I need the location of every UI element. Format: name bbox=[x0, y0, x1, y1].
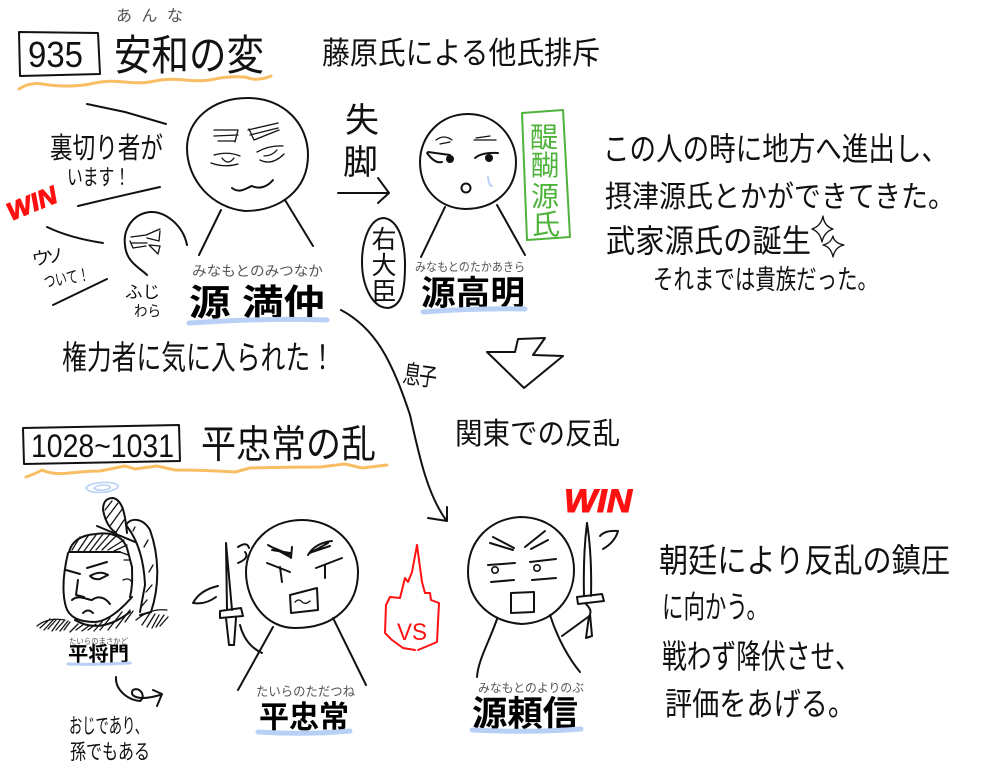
figure: Fujiwara: わら bbox=[134, 303, 161, 320]
name: Taira no Tadatsune: 平忠常 bbox=[259, 700, 349, 735]
name: Minamoto no Yorinobu bbox=[472, 681, 584, 734]
label: Daigo Genji: 醍 bbox=[530, 122, 558, 153]
name: Minamoto no Mitsunaka: 源 満仲 bbox=[189, 282, 325, 323]
title: 平忠常の乱: 平忠常の乱 bbox=[201, 424, 376, 467]
figure: Taira no Masakado portrait bbox=[37, 482, 168, 632]
label: minister of the right: 臣 bbox=[371, 278, 397, 306]
figure: Taira no Tadatsune bbox=[193, 520, 366, 690]
name: Taira no Masakado: たいらのまさかど bbox=[69, 637, 128, 646]
head and body bbox=[420, 114, 516, 209]
label: minister of the right: 大 bbox=[371, 252, 397, 280]
robe hatching bbox=[37, 610, 168, 632]
sword and arm bbox=[220, 543, 243, 645]
heading: Taira no Tadatsune rebellion bbox=[23, 424, 387, 477]
head and body bbox=[468, 517, 574, 624]
figure: Minamoto no Takaakira bbox=[420, 114, 525, 257]
text: suppression of rebellion: に向かう。 bbox=[662, 590, 768, 625]
text: suppression of rebellion: 評価をあげる。 bbox=[665, 686, 855, 722]
year box: 935 bbox=[19, 32, 100, 76]
note: uncle and grandson: 孫でもある bbox=[70, 741, 150, 764]
label: Daigo Genji: 源 bbox=[531, 181, 559, 212]
speech: lie: ついて！ bbox=[42, 265, 91, 292]
speech: lie: ウソ bbox=[30, 245, 65, 270]
label: WIN right: WIN bbox=[564, 483, 633, 519]
speech: traitor notice: 裏切り者が bbox=[50, 132, 163, 165]
name: Taira no Masakado: 平将門 bbox=[68, 643, 129, 666]
arrow: downfall: 脚 bbox=[343, 144, 378, 182]
face bbox=[490, 531, 548, 550]
text: explanation of Settsu Genji: 摂津源氏とかができてきた。 bbox=[605, 181, 955, 214]
hat and ribbon bbox=[103, 498, 127, 533]
text: suppression of rebellion bbox=[659, 542, 950, 722]
icon: VS flame: VS bbox=[397, 619, 427, 646]
figure: Minamoto no Yorinobu bbox=[468, 517, 618, 677]
arrow: downfall bbox=[338, 102, 389, 203]
name: Taira no Tadatsune: たいらのただつね bbox=[256, 684, 355, 699]
text: explanation of Settsu Genji: 武家源氏の誕生 bbox=[606, 223, 811, 259]
name: Taira no Tadatsune bbox=[256, 684, 355, 735]
orange underline bbox=[19, 76, 271, 89]
year box: 1028-1031: 1028~1031 bbox=[31, 428, 174, 464]
name: Minamoto no Yorinobu: 源頼信 bbox=[472, 695, 578, 734]
name: Minamoto no Takaakira: 源高明 bbox=[421, 275, 525, 313]
connector: son arrow bbox=[341, 310, 447, 521]
label: Daigo Genji: 氏 bbox=[532, 209, 560, 240]
figure: Fujiwara bbox=[125, 212, 187, 320]
face bbox=[63, 553, 132, 622]
text: suppression of rebellion: 戦わず降伏させ、 bbox=[662, 638, 860, 675]
name: Minamoto no Mitsunaka bbox=[189, 263, 327, 323]
label: minister of the right bbox=[362, 218, 405, 308]
motion marks bbox=[600, 531, 618, 549]
note: uncle and grandson: おじであり、 bbox=[69, 715, 148, 738]
face bbox=[436, 136, 496, 144]
name: Minamoto no Mitsunaka: みなもとのみつなか bbox=[192, 263, 323, 279]
icon: VS flame bbox=[385, 545, 439, 650]
face bbox=[268, 541, 332, 558]
text: suppression of rebellion: 朝廷により反乱の鎮圧 bbox=[659, 542, 950, 579]
figure: Minamoto no Mitsunaka bbox=[187, 98, 313, 255]
subtitle: 藤原氏による他氏排斥 bbox=[322, 36, 600, 71]
label: minister of the right: 右 bbox=[371, 226, 397, 254]
arrow: swirl to note bbox=[116, 677, 162, 706]
icon: sparkles bbox=[812, 216, 844, 257]
year box: 935: 935 bbox=[28, 34, 83, 75]
head and body bbox=[187, 98, 308, 211]
caption: favored by power: 権力者に気に入られた！ bbox=[62, 339, 335, 376]
text: explanation of Settsu Genji: それまでは貴族だった。 bbox=[653, 265, 878, 295]
face bbox=[214, 123, 279, 142]
name: Minamoto no Yorinobu: みなもとのよりのぶ bbox=[478, 681, 584, 695]
name: Minamoto no Takaakira bbox=[415, 260, 525, 313]
figure: Fujiwara: ふじ bbox=[125, 283, 160, 302]
motion marks bbox=[193, 544, 249, 603]
reading: anna: あんな bbox=[116, 7, 183, 25]
sword and arm bbox=[577, 523, 604, 638]
label: Daigo Genji bbox=[522, 110, 570, 240]
head and body bbox=[246, 520, 358, 628]
connector: son arrow: 息子 bbox=[401, 359, 439, 392]
orange underline bbox=[26, 464, 387, 477]
note: uncle and grandson bbox=[69, 715, 150, 764]
text: explanation of Settsu Genji bbox=[603, 131, 955, 295]
name: Minamoto no Takaakira: みなもとのたかあきら bbox=[415, 260, 525, 274]
speech: traitor notice bbox=[50, 104, 166, 206]
hollow down arrow bbox=[487, 338, 563, 388]
caption: rebellion in Kanto: 関東での反乱 bbox=[455, 418, 620, 451]
title: 安和の変: 安和の変 bbox=[114, 32, 264, 79]
speech: lie bbox=[30, 227, 107, 305]
arrow: downfall: 失 bbox=[345, 102, 379, 140]
label: WIN left: WIN bbox=[3, 181, 62, 227]
heading: 935 Anna incident bbox=[19, 7, 600, 89]
speech: traitor notice: います！ bbox=[67, 165, 130, 190]
halo bbox=[86, 482, 118, 492]
label: Daigo Genji: 醐 bbox=[531, 150, 559, 181]
